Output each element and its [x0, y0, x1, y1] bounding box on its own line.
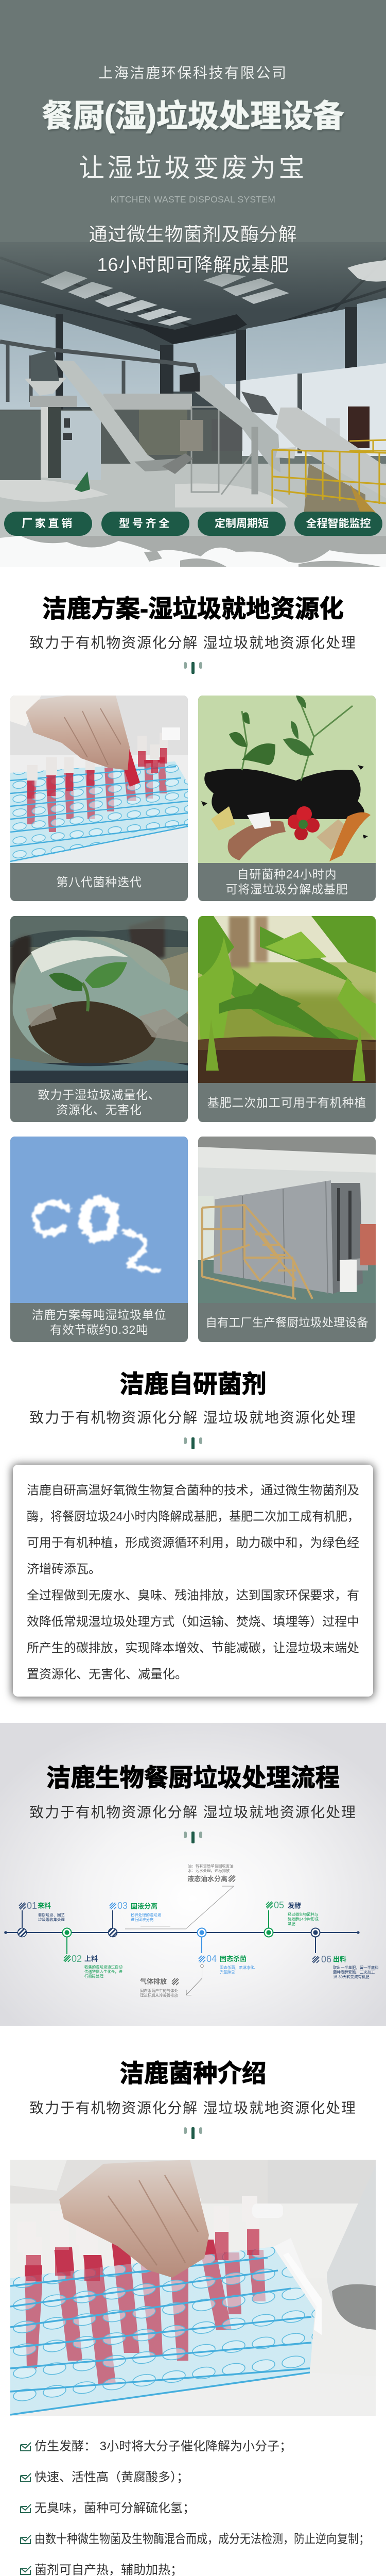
text block: bacteria description: 济增砖添瓦。 [27, 1562, 101, 1577]
process timeline chart: 理达标后从冷凝管排放 [140, 1993, 179, 1998]
process timeline chart: 水：污水处理，达标排放 [188, 1868, 230, 1873]
process timeline chart: 05 [274, 1900, 284, 1910]
caption: 洁鹿方案每吨湿垃圾单位 [32, 1308, 166, 1321]
section subtitle: 致力于有机物资源化分解 湿垃圾就地资源化处理 [29, 1410, 357, 1426]
text block: bacteria description: 所产生的碳排放，实现降本增效、节能减碳，让湿垃圾末端处 [27, 1641, 359, 1655]
process timeline chart: 取出一半基肥，留一半底料 [333, 1965, 379, 1970]
section dots [184, 2127, 202, 2139]
caption [32, 1308, 166, 1336]
caption: 基肥二次加工可用于有机种植 [207, 1095, 366, 1109]
caption: 资源化、无害化 [56, 1103, 142, 1116]
caption: 第八代菌种迭代 [56, 875, 142, 888]
photo: seedling in glass bulb [10, 916, 188, 1083]
text block: bacteria description: 洁鹿自研高温好氧微生物复合菌种的技术，通过微生物菌剂及 [27, 1484, 359, 1497]
subtitle: 让湿垃圾变废为宝 [79, 154, 307, 182]
process timeline chart: 06 [321, 1954, 331, 1964]
process timeline chart: 行粉碎处理 [84, 1974, 104, 1978]
text block: bacteria description: 置资源化、无害化、减量化。 [27, 1667, 187, 1682]
process timeline chart [4, 1864, 379, 1998]
card: 第八代菌种迭代 [10, 696, 188, 901]
card: 自研菌种 [198, 696, 376, 901]
process timeline chart: 基肥 [288, 1922, 295, 1926]
process timeline chart: 液态油水分离 [187, 1875, 227, 1883]
text block: bacteria description [27, 1484, 359, 1682]
heading: 洁鹿方案: 洁鹿方案-湿垃圾就地资源化 [42, 596, 344, 623]
feature pill: 定制周期短 [215, 518, 269, 530]
list: bacteria features [20, 2439, 370, 2576]
process timeline chart: 油：转有资质单位回收废油 [188, 1864, 234, 1868]
process timeline chart: 粉碎处理的湿垃圾 [131, 1912, 162, 1918]
process timeline chart: 固态杀菌，喷淋净化、 [220, 1965, 258, 1970]
section subtitle: 致力于有机物资源化分解 湿垃圾就地资源化处理 [29, 635, 357, 651]
caption: 自研菌种24小时内 [237, 868, 337, 881]
section subtitle: 致力于有机物资源化分解 湿垃圾就地资源化处理 [29, 1804, 357, 1820]
photo: test tubes in rack [10, 696, 188, 863]
process timeline chart: 01 [27, 1901, 37, 1911]
section dots [184, 662, 202, 674]
process timeline chart: 来料 [38, 1902, 51, 1909]
text block: bacteria description: 全过程做到无废水、臭味、残油排放，达到国家环保要求，有 [27, 1589, 359, 1602]
feature pill: 型号齐全 [119, 518, 172, 530]
process timeline chart: 固态杀菌 [220, 1955, 247, 1963]
photo: machine with wooden stairs [198, 1137, 376, 1303]
process timeline chart: 03 [117, 1901, 128, 1911]
process timeline chart: 发酵 [288, 1902, 301, 1909]
process timeline chart: 餐厨垃圾、园艺 [38, 1912, 65, 1918]
card: 基肥 [198, 916, 376, 1122]
feature pill [294, 512, 382, 536]
process timeline chart: 经过微生物菌种与 [288, 1912, 318, 1917]
photo: corn seedlings [198, 916, 376, 1083]
process timeline chart: 进行固液分离 [131, 1918, 153, 1922]
caption [225, 868, 348, 896]
list: bacteria features: 由数十种微生物菌及生物酶混合而成，成分无法检测，防止逆向复制； [34, 2532, 370, 2546]
text block: bacteria description: 酶，将餐厨垃圾24小时内降解成基肥，基肥二次加工成有机肥， [27, 1510, 359, 1524]
process timeline chart: 传送链倒入生化仓，进 [84, 1969, 123, 1974]
process timeline chart: 15-30天转变成有机肥 [333, 1974, 370, 1979]
photo: CO2 shaped clouds in blue sky [10, 1137, 188, 1303]
process timeline chart: 酶发酵24小时形成 [288, 1917, 319, 1922]
hero banner [0, 0, 386, 567]
heading: 处理流程: 洁鹿生物餐厨垃圾处理流程 [46, 1765, 340, 1792]
company name: 上海洁鹿环保科技有限公司 [98, 65, 288, 81]
section dots [184, 1437, 202, 1449]
process timeline chart: 04 [206, 1954, 217, 1964]
text block: bacteria description: 可用于有机种植，形成资源循环利用，助力碳中和，为绿色经 [27, 1536, 359, 1550]
process timeline chart: 光氧除臭 [220, 1970, 235, 1974]
feature pill: 全程智能监控 [306, 518, 371, 530]
caption [38, 1088, 161, 1116]
section dots [184, 1832, 202, 1843]
process timeline chart: 固态杀菌产生的气体处 [140, 1989, 179, 1993]
feature pill [4, 512, 92, 536]
list: bacteria features: 快速、活性高（黄腐酸多）； [34, 2470, 189, 2484]
main title: 餐厨(湿)垃圾处理设备 [42, 98, 344, 133]
panel: process background [0, 1723, 386, 2026]
photo: soil, food waste and seedlings [198, 696, 376, 863]
process timeline chart: 固液分离 [131, 1902, 157, 1910]
process timeline chart: 02 [72, 1954, 82, 1964]
list: bacteria features: 无臭味，菌种可分解硫化氢； [34, 2501, 195, 2515]
hero description: 通过微生物菌剂及酶分解 [89, 224, 297, 245]
caption: 可将湿垃圾分解成基肥 [225, 883, 348, 896]
card: 节碳 [10, 1137, 188, 1342]
english label: KITCHEN WASTE DISPOSAL SYSTEM [111, 194, 275, 205]
hero photo: factory conveyor line [0, 242, 386, 567]
feature pill: 厂家直销 [22, 518, 75, 530]
process timeline chart: 上料 [84, 1955, 98, 1963]
hero description [89, 224, 297, 275]
caption: 自有工厂生产餐厨垃圾处理设备 [205, 1316, 369, 1329]
panel: company text [13, 1465, 373, 1697]
process timeline chart: 菌种发酵繁殖，二次加工 [333, 1970, 375, 1974]
photo: test tubes close-up [10, 2160, 376, 2416]
text block: bacteria description: 效降低常规湿垃圾处理方式（如运输、焚烧、填埋等）过程中 [27, 1615, 359, 1629]
feature pill [101, 512, 189, 536]
caption: 有效节碳约0.32吨 [50, 1323, 148, 1336]
process timeline chart: 气体排放 [140, 1977, 167, 1986]
card: 自有工厂 [198, 1137, 376, 1342]
heading: 洁鹿菌种介绍: 洁鹿菌种介绍 [119, 2060, 267, 2088]
heading: 洁鹿自研菌剂: 洁鹿自研菌剂 [119, 1371, 267, 1398]
process timeline chart: 垃圾等收集处理 [38, 1918, 65, 1922]
hero description: 16小时即可降解成基肥 [97, 254, 289, 275]
list: bacteria features: 仿生发酵： 3小时将大分子催化降解为小分子； [34, 2439, 292, 2453]
section subtitle: 致力于有机物资源化分解 湿垃圾就地资源化处理 [29, 2100, 357, 2116]
card: 减量化 [10, 916, 188, 1122]
process timeline chart: 出料 [333, 1956, 346, 1963]
process timeline chart: 收集的湿垃圾通过自动 [84, 1965, 122, 1969]
caption: 致力于湿垃圾减量化、 [38, 1088, 161, 1101]
feature pill [198, 512, 286, 536]
